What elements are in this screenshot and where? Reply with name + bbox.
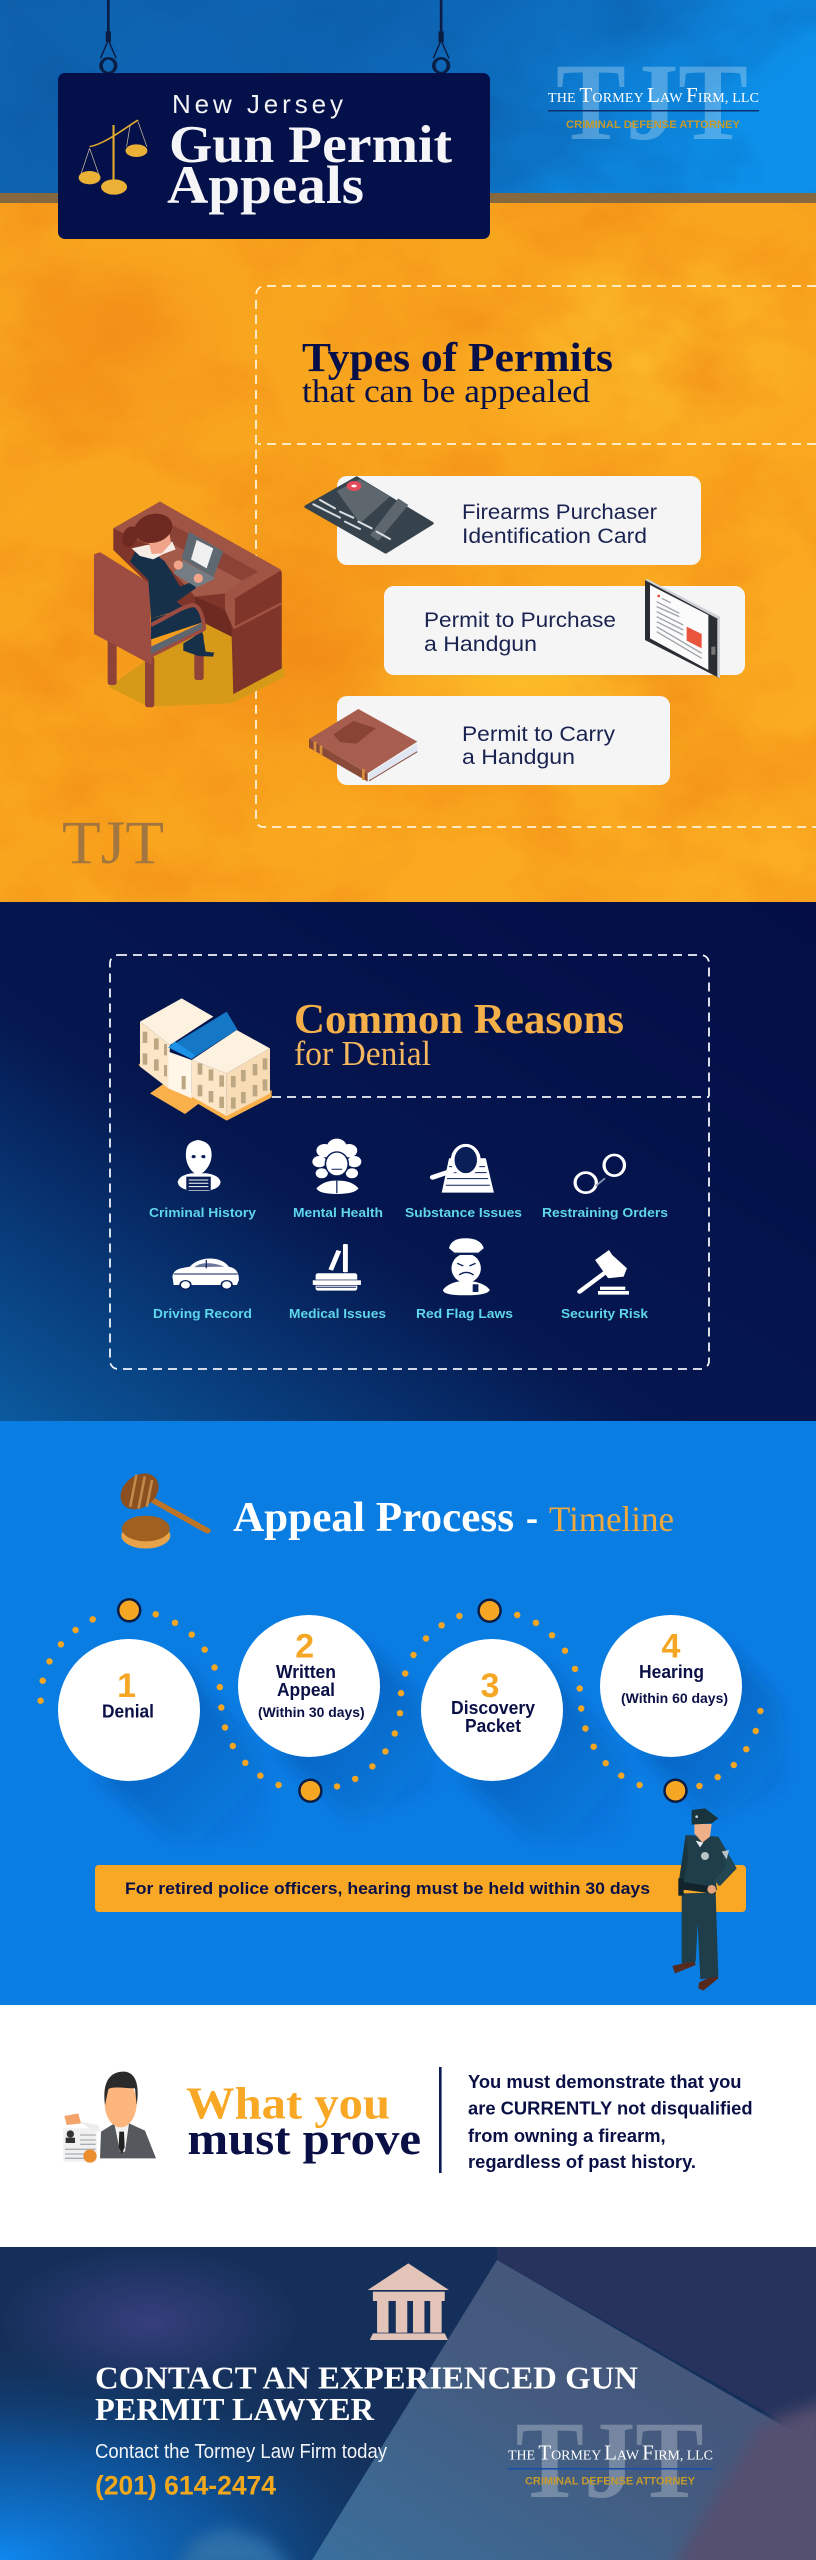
step 3: Discovery Packet bbox=[421, 1639, 563, 1781]
reason: Driving Record bbox=[153, 1258, 252, 1321]
permit card 3 bbox=[309, 696, 670, 785]
panel: contact section photo background bbox=[0, 2247, 816, 2560]
step 2: Written Appeal bbox=[238, 1615, 380, 1757]
label: Discovery bbox=[451, 1698, 535, 1718]
icon: gavel bbox=[580, 1250, 629, 1295]
icon: prisoner bbox=[178, 1140, 221, 1191]
label: Security Risk bbox=[561, 1306, 649, 1321]
step 4: Hearing bbox=[600, 1615, 742, 1757]
heading: What you: What you bbox=[186, 2078, 390, 2129]
body text bbox=[468, 2072, 753, 2172]
title: Appeals: Appeals bbox=[167, 155, 364, 215]
label: Written bbox=[276, 1662, 336, 1682]
panel: common reasons dashed frame bbox=[110, 955, 709, 1369]
label: Criminal History bbox=[149, 1205, 257, 1220]
icon: ID card bbox=[306, 478, 432, 552]
label: Driving Record bbox=[153, 1306, 252, 1321]
text: a Handgun bbox=[424, 633, 537, 656]
icon: book bbox=[309, 709, 417, 782]
heading: must prove: must prove bbox=[188, 2113, 421, 2164]
callout: retired police officers bbox=[95, 1865, 746, 1912]
heading: Appeal Process - Timeline: Timeline bbox=[549, 1499, 674, 1539]
icon: handcuffs bbox=[575, 1155, 624, 1193]
reason: Medical Issues bbox=[289, 1244, 386, 1321]
number: 4 bbox=[662, 1628, 681, 1666]
heading: Common Reasons: Common Reasons bbox=[294, 997, 624, 1043]
body text: from owning a firearm, bbox=[468, 2126, 666, 2146]
icon: car bbox=[172, 1258, 239, 1289]
text: Permit to Carry bbox=[462, 723, 616, 746]
heading: contact an experienced gun permit lawyer: CONTACT AN EXPERIENCED GUN bbox=[95, 2360, 638, 2396]
step 1: Denial bbox=[58, 1639, 200, 1781]
text: phone number: (201) 614-2474 bbox=[95, 2471, 276, 2501]
panel: orange permits background bbox=[0, 203, 816, 902]
number: 2 bbox=[295, 1628, 314, 1666]
icon: courthouse bbox=[368, 2263, 449, 2340]
text: contact line: Contact the Tormey Law Firm today bbox=[95, 2441, 387, 2463]
body text: regardless of past history. bbox=[468, 2152, 696, 2172]
permit card 1 bbox=[306, 476, 701, 565]
label: Packet bbox=[465, 1716, 521, 1736]
logo: footer firm logo: CRIMINAL DEFENSE ATTORNEY bbox=[525, 2476, 696, 2488]
number: 1 bbox=[117, 1667, 136, 1705]
icon: woman with curly hair bbox=[312, 1139, 361, 1194]
title: New Jersey: New Jersey bbox=[172, 89, 343, 119]
illustration: lawyer at desk bbox=[95, 502, 285, 707]
panel: blue header background bbox=[0, 0, 816, 203]
text: a Handgun bbox=[462, 746, 575, 769]
chart: timeline shadows bbox=[95, 1640, 790, 1840]
logo: header firm logo: TJT bbox=[556, 41, 748, 163]
label: Denial bbox=[102, 1702, 154, 1722]
panel: what you must prove bbox=[0, 2005, 816, 2246]
icon: police officer bbox=[443, 1238, 490, 1295]
heading: contact an experienced gun permit lawyer bbox=[95, 2360, 638, 2427]
icon: magnifier on document bbox=[433, 1145, 494, 1193]
reason: Red Flag Laws bbox=[416, 1238, 513, 1321]
divider bbox=[439, 2067, 442, 2173]
panel: types of permits dashed frame bbox=[256, 286, 816, 827]
illustration: police officer bbox=[672, 1808, 737, 1991]
reason: Restraining Orders bbox=[542, 1155, 668, 1220]
logo: header firm logo: THE TORMEY LAW FIRM, LLC bbox=[548, 83, 759, 107]
body text: You must demonstrate that you bbox=[468, 2072, 742, 2092]
text: Identification Card bbox=[462, 525, 647, 548]
number: 3 bbox=[481, 1667, 499, 1705]
reason: Mental Health bbox=[293, 1139, 383, 1220]
heading: Appeal Process - Timeline bbox=[233, 1495, 674, 1541]
icon: scales of justice bbox=[79, 120, 147, 195]
icon: man with document bbox=[63, 2072, 156, 2163]
reason: Substance Issues bbox=[405, 1145, 522, 1220]
icon: tablet bbox=[645, 579, 720, 678]
heading: Types of Permits: Types of Permits bbox=[302, 334, 613, 380]
icon: hanging cords bbox=[101, 0, 449, 73]
logo: footer firm logo: TJT bbox=[516, 2399, 704, 2521]
text: Firearms Purchaser bbox=[462, 501, 657, 524]
heading: contact an experienced gun permit lawyer: PERMIT LAWYER bbox=[95, 2391, 375, 2427]
subheading: that can be appealed: that can be appealed bbox=[302, 374, 591, 410]
label: Mental Health bbox=[293, 1205, 383, 1220]
subheading: for Denial: for Denial bbox=[294, 1034, 431, 1073]
label: Hearing bbox=[639, 1662, 704, 1682]
label: Medical Issues bbox=[289, 1306, 386, 1321]
heading: Appeal Process - Timeline: - bbox=[526, 1495, 538, 1541]
label: Appeal bbox=[277, 1680, 335, 1700]
label: Substance Issues bbox=[405, 1205, 522, 1220]
icon: medical kit bbox=[312, 1244, 361, 1291]
icon: wooden gavel and block bbox=[114, 1470, 207, 1549]
reason: Criminal History bbox=[149, 1140, 257, 1220]
logo: header firm logo: CRIMINAL DEFENSE ATTORNEY bbox=[566, 119, 741, 131]
logo: TJT mark: TJT bbox=[62, 810, 164, 877]
body text: are CURRENTLY not disqualified bbox=[468, 2099, 753, 2119]
panel: title sign bbox=[58, 73, 490, 239]
logo: footer firm logo: THE TORMEY LAW FIRM, LLC bbox=[508, 2441, 713, 2465]
chart: dotted timeline path bbox=[37, 1599, 764, 1802]
panel: appeal process background bbox=[0, 1421, 816, 2005]
panel: common reasons background bbox=[0, 902, 816, 1421]
callout: retired police officers: For retired police officers, hearing must be held within 30 days bbox=[125, 1879, 650, 1898]
deadline: (Within 30 days) bbox=[258, 1704, 365, 1720]
heading: Appeal Process - Timeline: Appeal Process bbox=[233, 1495, 514, 1541]
label: Red Flag Laws bbox=[416, 1306, 513, 1321]
label: Restraining Orders bbox=[542, 1205, 668, 1220]
deadline: (Within 60 days) bbox=[621, 1690, 728, 1706]
permit card 2 bbox=[384, 579, 745, 678]
icon: courthouse building bbox=[138, 998, 272, 1121]
text: Permit to Purchase bbox=[424, 609, 616, 632]
reason: Security Risk bbox=[561, 1250, 649, 1321]
title: Gun Permit: Gun Permit bbox=[169, 116, 452, 174]
